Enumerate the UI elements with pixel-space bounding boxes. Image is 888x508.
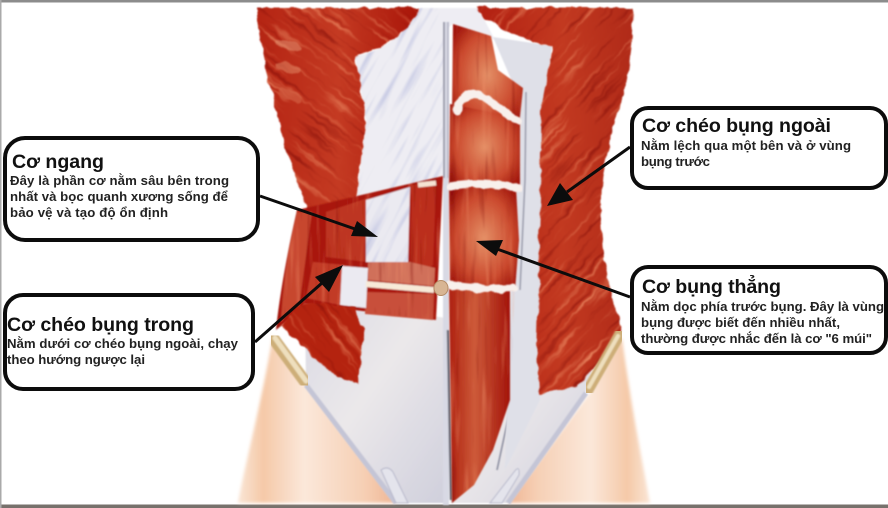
callout: cơ chéo bụng ngoài [632, 108, 886, 188]
rectus second segment [449, 104, 520, 190]
rectus upper segment [452, 24, 523, 126]
deep window background [276, 176, 443, 330]
arrow: cơ chéo bụng ngoài [547, 147, 630, 206]
arrow: cơ ngang [260, 196, 378, 237]
callout: cơ chéo bụng ngoài: Nằm lệch qua một bên và ở vùng [641, 138, 851, 153]
rectus lower segment [449, 285, 510, 503]
arrow: cơ chéo bụng trong [255, 265, 343, 342]
upper left fascia [355, 8, 495, 200]
rectus fibres [449, 24, 523, 503]
callout: cơ ngang: nhất và bọc quanh xương sống để [10, 189, 229, 204]
right fascia strip [493, 37, 552, 470]
external oblique lower left [280, 302, 364, 385]
lower abdominal fascia [305, 300, 600, 503]
callout: cơ bụng thẳng: Nằm dọc phía trước bụng. Đây là vùng [641, 299, 884, 314]
callout: cơ ngang: Đây là phần cơ nằm sâu bên trong [10, 173, 229, 188]
rectus third segment [449, 186, 519, 290]
left thigh skin [238, 335, 396, 503]
central linea alba [443, 22, 510, 505]
inner oblique aponeurosis [340, 266, 368, 308]
transverse muscle aponeurosis [366, 187, 410, 262]
rectus abdominis muscle [449, 24, 523, 503]
navel [434, 280, 448, 296]
callout: cơ bụng thẳng: bụng được biết đến nhiều nhất, [641, 315, 840, 330]
callout: cơ bụng thẳng: Cơ bụng thẳng [642, 274, 781, 298]
external oblique right [475, 8, 633, 393]
callout: cơ chéo bụng ngoài: Cơ chéo bụng ngoài [642, 115, 831, 137]
callout: cơ chéo bụng trong: theo hướng ngược lại [7, 352, 145, 367]
callout: cơ ngang: Cơ ngang [12, 151, 104, 173]
right iliac ligament [588, 334, 620, 390]
callout: cơ chéo bụng trong: Nằm dưới cơ chéo bụng ngoài, chạy [7, 336, 239, 351]
tendinous intersections [450, 94, 519, 289]
callout: cơ bụng thẳng: thường được nhắc đến là cơ "6 múi" [641, 331, 872, 346]
callout: cơ bụng thẳng [632, 267, 886, 353]
left iliac ligament [273, 338, 306, 383]
arrow: cơ bụng thẳng [476, 240, 630, 297]
callout: cơ ngang: bảo vệ và tạo độ ổn định [10, 205, 168, 220]
callout: cơ chéo bụng trong [5, 295, 253, 389]
torso illustration [238, 8, 650, 505]
callout: cơ chéo bụng trong: Cơ chéo bụng trong [7, 314, 194, 336]
callout: cơ ngang [5, 138, 258, 240]
external oblique upper left [257, 8, 420, 211]
right thigh skin [508, 338, 650, 503]
callout: cơ chéo bụng ngoài: bụng trước [641, 154, 710, 169]
